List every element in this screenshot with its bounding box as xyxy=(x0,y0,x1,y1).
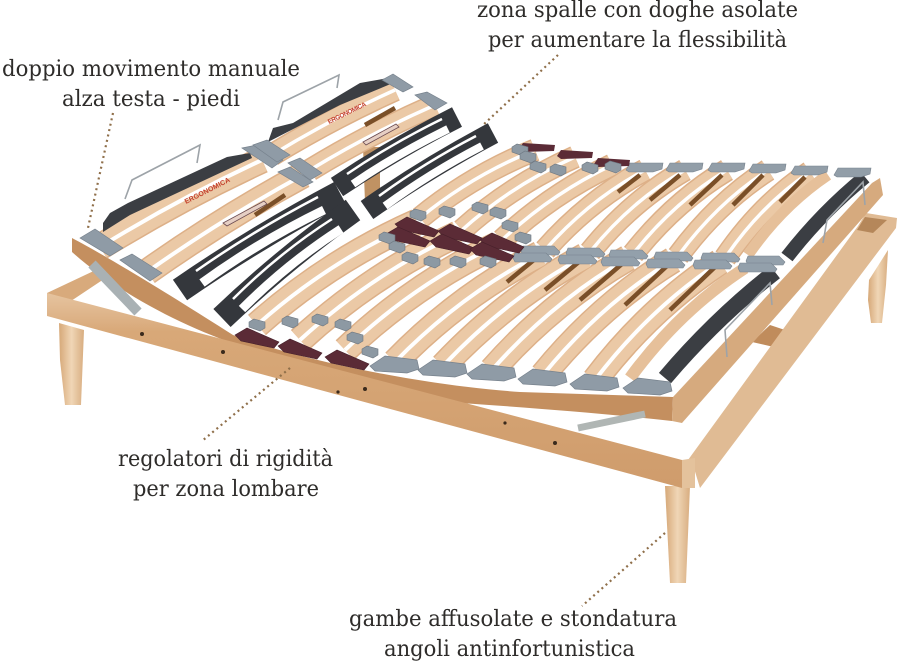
small badge two xyxy=(363,124,399,145)
lifted slat frame side xyxy=(72,238,673,421)
callout: legs: gambe affusolate e stondatura xyxy=(349,607,677,632)
callout: lumbar regulators xyxy=(118,447,333,502)
callout: legs: angoli antinfortunistica xyxy=(384,637,635,662)
callout: lumbar regulators: regolatori di rigidità xyxy=(118,447,333,472)
lifted frame right side xyxy=(672,178,883,423)
callout: double movement xyxy=(2,57,300,112)
wooden slats front panel xyxy=(100,160,745,380)
small badge one xyxy=(223,201,267,226)
centre double caps xyxy=(513,246,785,272)
dotted leader: lumbar regulators xyxy=(202,368,290,441)
left rear frame rail xyxy=(47,268,107,316)
ergonomica label one: ERGONOMICA xyxy=(184,177,231,206)
dotted leader: legs xyxy=(582,533,665,606)
front-right leg xyxy=(665,486,690,583)
maroon lumbar regulators xyxy=(235,143,630,370)
callout: double movement: doppio movimento manuale xyxy=(2,57,300,82)
callout: shoulder zone: per aumentare la flessibilità xyxy=(488,28,787,53)
head grey caps xyxy=(80,74,447,281)
back grey caps xyxy=(626,163,871,177)
metal lift arm right xyxy=(578,414,645,428)
dark right strips xyxy=(665,177,865,378)
metal lift arm left xyxy=(92,264,138,312)
dotted leader: shoulder zone xyxy=(483,55,558,125)
wooden slats back panel xyxy=(272,90,828,258)
dark head strip two xyxy=(268,78,393,142)
callout: shoulder zone xyxy=(477,0,798,53)
callout: double movement: alza testa - piedi xyxy=(62,87,240,112)
head support column xyxy=(363,147,380,203)
callout: legs xyxy=(349,607,677,662)
dark head strip one xyxy=(103,153,252,232)
ergonomica label two: ERGONOMICA xyxy=(327,101,368,126)
right frame rail xyxy=(688,213,897,488)
silver wire handles xyxy=(125,75,865,357)
front frame rail xyxy=(47,293,695,488)
callout: lumbar regulators: per zona lombare xyxy=(133,477,319,502)
front grey caps xyxy=(370,356,672,395)
dark slotted plates xyxy=(180,117,493,318)
brown shadow strips between slats xyxy=(255,108,805,310)
back-left leg xyxy=(59,323,84,405)
grey lumbar clips xyxy=(249,144,621,358)
back-right leg xyxy=(868,250,888,323)
centre cross support xyxy=(752,325,785,348)
dotted leader: double movement xyxy=(88,113,113,228)
